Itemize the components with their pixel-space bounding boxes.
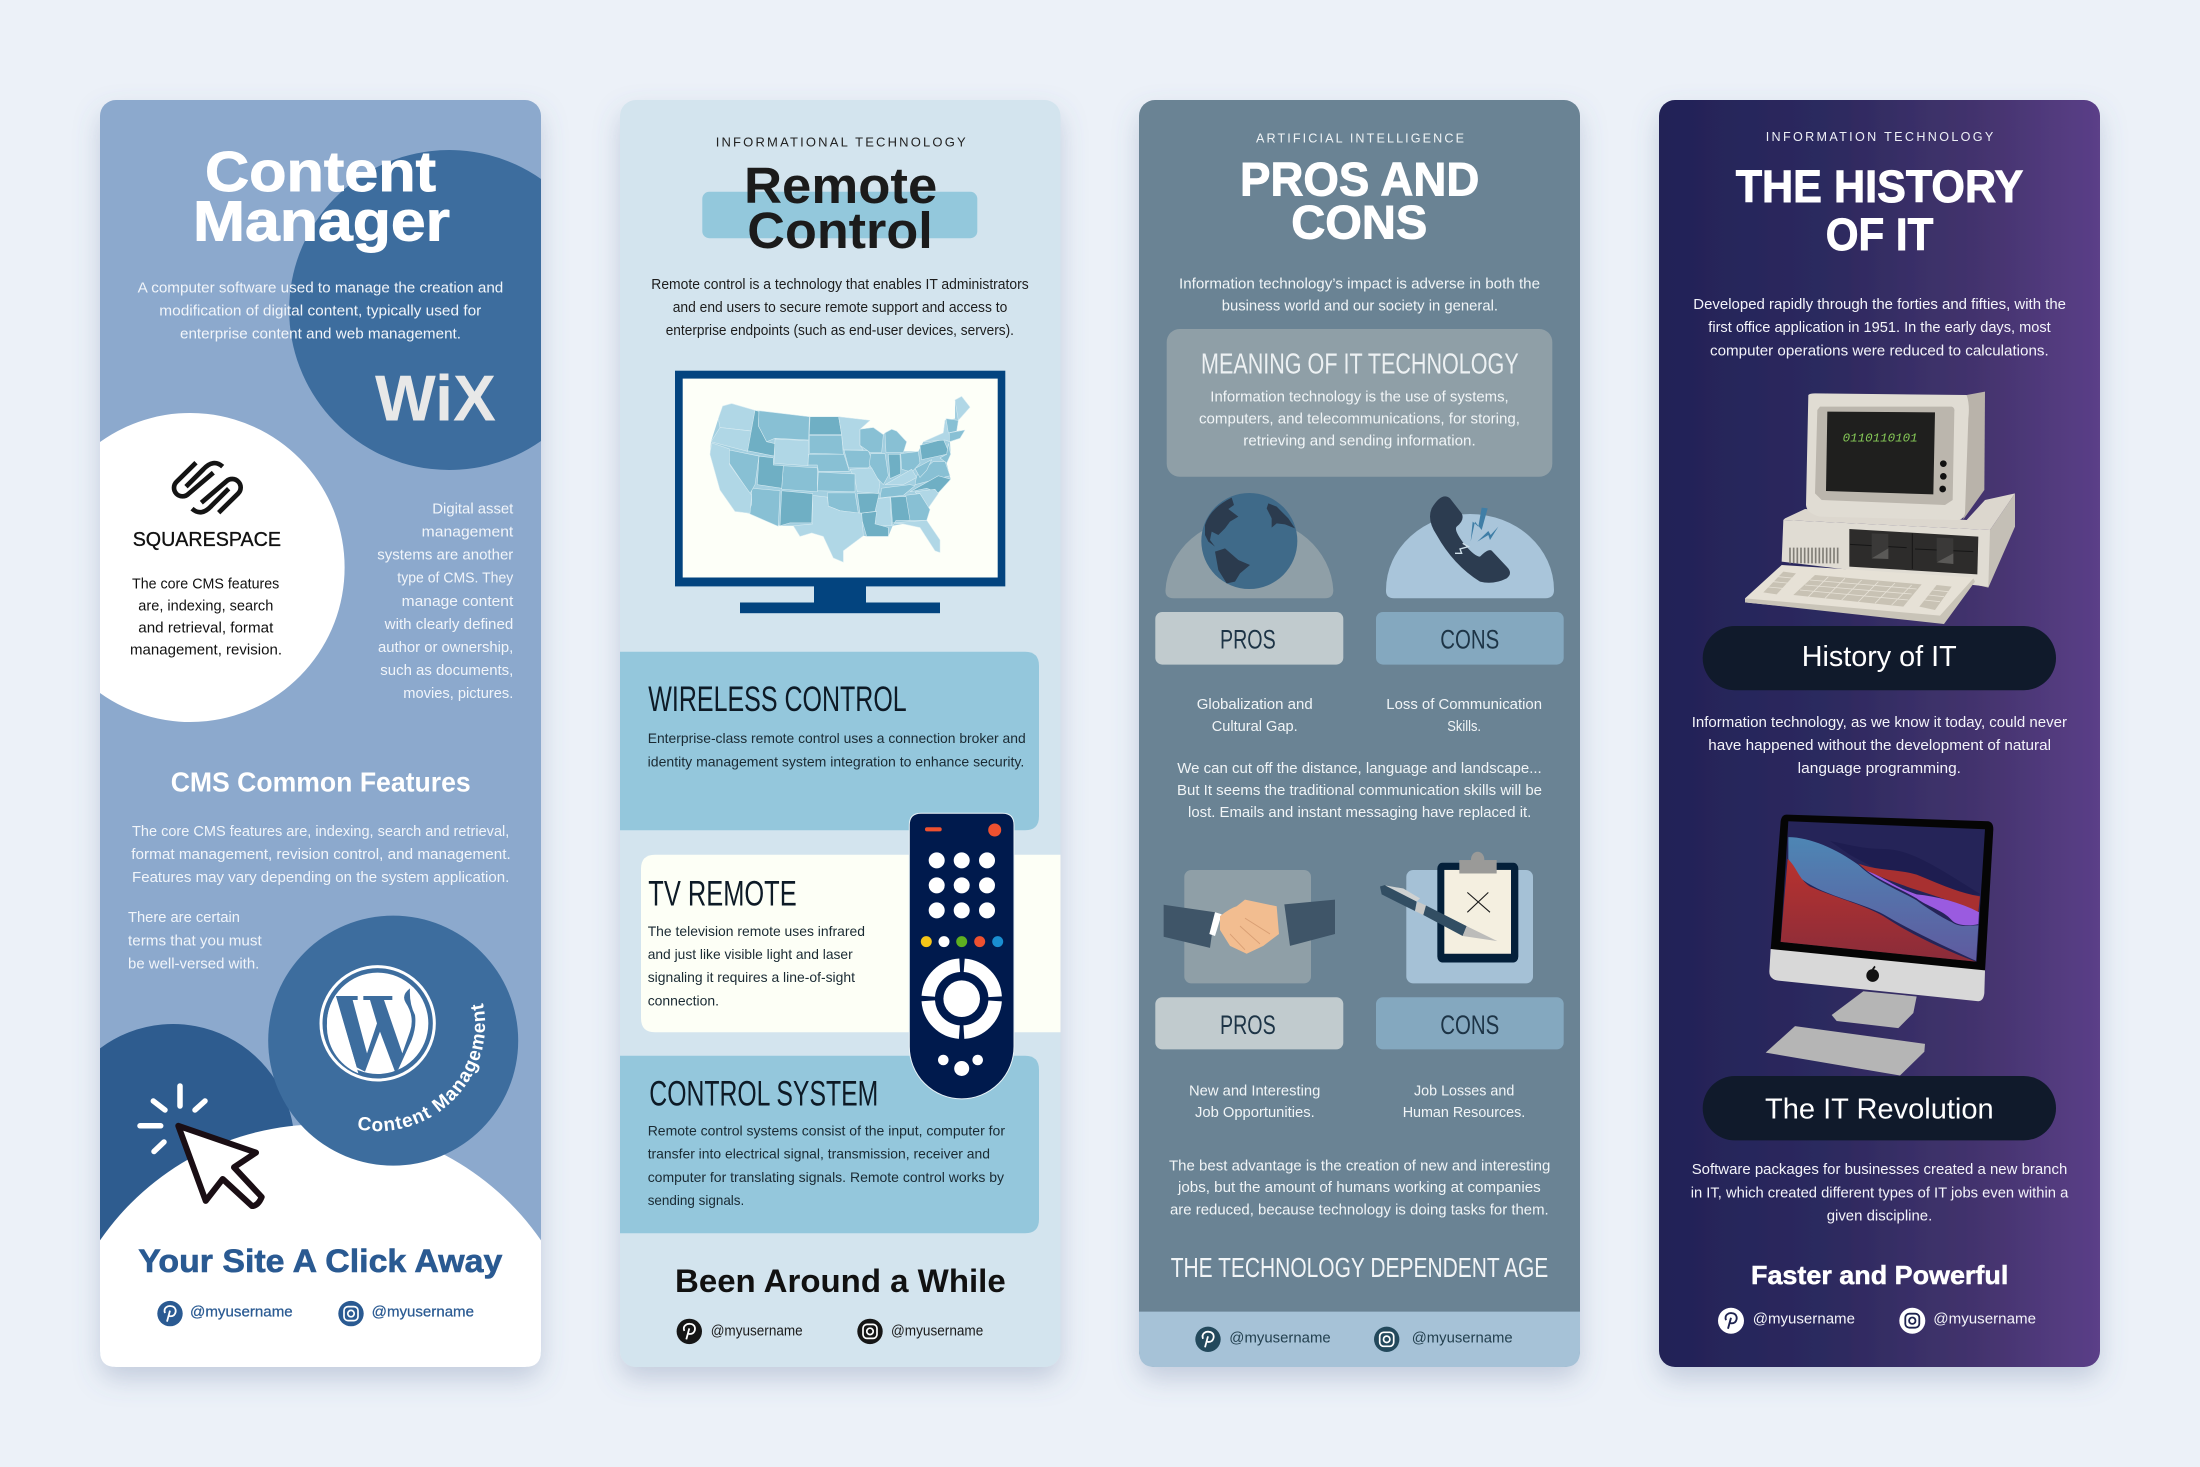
heading: CMS Common Features: CMS Common Features — [171, 767, 471, 798]
text: best advantage: jobs, but the amount of humans working at companies — [1177, 1179, 1541, 1196]
icon: broken phone on dome — [1386, 496, 1554, 598]
text: digital asset management: systems are another — [377, 547, 513, 564]
pill: The IT Revolution — [1703, 1076, 2056, 1140]
social: pinterest — [1195, 1327, 1331, 1352]
badge: cons — [1376, 997, 1564, 1049]
badge: pros: PROS — [1220, 1010, 1276, 1040]
icon: click sparks — [140, 1086, 205, 1152]
social: instagram — [1374, 1327, 1513, 1352]
card: TV Remote — [641, 855, 1060, 1032]
text: natural language: Information technology, as we know it today, could never — [1692, 714, 2067, 731]
icon: handshake — [1164, 870, 1335, 983]
box: meaning of IT technology — [1167, 329, 1552, 477]
card: TV Remote: signaling it requires a line-of-sight — [648, 969, 855, 985]
social: instagram: @myusername — [372, 1304, 474, 1321]
text: communication: But It seems the traditional communication skills will be — [1177, 782, 1542, 799]
intro text: Information technology’s impact is adverse in both the — [1179, 276, 1540, 293]
social: instagram — [857, 1319, 983, 1344]
intro text: Developed rapidly through the forties and fifties, with the — [1693, 296, 2066, 313]
badge: cons — [1376, 612, 1564, 665]
intro text: Remote control is a technology that enables IT administrators — [651, 277, 1029, 293]
text: communication — [1177, 760, 1542, 821]
text: digital asset management: with clearly defined — [384, 616, 513, 633]
text: digital asset management: type of CMS. They — [397, 570, 514, 587]
intro text: computer operations were reduced to calculations. — [1710, 342, 2049, 359]
text: features description: The core CMS features are, indexing, search and retrieval, — [132, 823, 509, 840]
text: digital asset management: management — [422, 524, 514, 541]
card: Control System: sending signals. — [648, 1192, 744, 1208]
eyebrow: ARTIFICIAL INTELLIGENCE — [1256, 132, 1464, 146]
title highlight bar — [702, 192, 977, 238]
social: instagram — [1899, 1308, 2036, 1334]
text: natural language: language programming. — [1798, 760, 1961, 777]
panel: The History of IT — [1659, 100, 2100, 1367]
text: pros two — [1189, 1082, 1320, 1121]
logo: Squarespace wordmark: SQUARESPACE — [133, 528, 281, 551]
badge: pros: PROS — [1220, 624, 1276, 654]
social: instagram: @myusername — [891, 1324, 983, 1340]
icon: retro computer: 0110110101 — [1843, 431, 1918, 445]
heading: Been Around a While: Been Around a While — [675, 1263, 1006, 1299]
card: Control System: transfer into electrical signal, transmission, receiver and — [648, 1146, 990, 1162]
title: Content — [205, 140, 436, 204]
card: Wireless Control: Enterprise-class remote control uses a connection broker and — [648, 730, 1026, 746]
text: digital asset management: movies, pictures. — [403, 685, 513, 702]
pill: History of IT — [1703, 626, 2056, 690]
text: features description: Features may vary depending on the system application. — [132, 869, 509, 886]
logo: Wix: WiX — [375, 361, 496, 434]
badge: cons: CONS — [1440, 624, 1499, 654]
box: meaning of IT technology: retrieving and sending information. — [1243, 433, 1476, 450]
intro text: enterprise content and web management. — [180, 326, 461, 342]
text: digital asset management — [377, 501, 514, 702]
text: software packages: in IT, which created different types of IT jobs even within a — [1691, 1184, 2069, 1201]
card: TV Remote: and just like visible light and laser — [648, 946, 853, 962]
title: Control — [747, 202, 933, 259]
text: core features: The core CMS features — [132, 576, 279, 593]
card: Control System: CONTROL SYSTEM — [649, 1074, 878, 1113]
social: pinterest — [157, 1301, 293, 1326]
badge: pros — [1155, 612, 1343, 665]
text: cons one — [1386, 696, 1542, 735]
text: digital asset management: manage content — [402, 593, 514, 610]
heading: Faster and Powerful: Faster and Powerful — [1751, 1260, 2008, 1290]
social: instagram: @myusername — [1933, 1310, 2036, 1328]
title — [1240, 152, 1479, 248]
icon: modern desktop computer — [1766, 815, 1993, 1076]
card: TV Remote: The television remote uses infrared — [648, 923, 865, 939]
map: United States — [710, 396, 970, 562]
text: natural language — [1692, 714, 2067, 777]
icon: TV remote — [909, 813, 1014, 1099]
text: terms: be well-versed with. — [128, 955, 259, 972]
card: Wireless Control: identity management system integration to enhance security. — [648, 754, 1024, 770]
icon: WordPress logo — [321, 967, 434, 1080]
text: core features: and retrieval, format — [138, 620, 274, 636]
text: features description: format management, revision control, and management. — [131, 846, 511, 863]
text: best advantage: The best advantage is the creation of new and interesting — [1169, 1157, 1550, 1174]
text: pros one: Cultural Gap. — [1212, 718, 1298, 735]
eyebrow: INFORMATION TECHNOLOGY — [1766, 130, 1994, 144]
intro text: first office application in 1951. In the early days, most — [1708, 319, 2051, 336]
intro text: enterprise endpoints (such as end-user devices, servers). — [666, 323, 1014, 339]
text: best advantage: are reduced, because technology is doing tasks for them. — [1170, 1201, 1549, 1218]
box: meaning of IT technology: MEANING OF IT TECHNOLOGY — [1201, 349, 1519, 381]
text: best advantage — [1169, 1157, 1550, 1218]
text: pros two: Job Opportunities. — [1195, 1104, 1315, 1121]
eyebrow: INFORMATIONAL TECHNOLOGY — [716, 134, 966, 149]
title: THE HISTORY — [1736, 161, 2023, 212]
intro text: and end users to secure remote support and access to — [673, 300, 1007, 316]
title: Remote — [744, 157, 937, 214]
text: pros two: New and Interesting — [1189, 1082, 1320, 1099]
text: digital asset management: author or ownership, — [378, 639, 513, 656]
text: software packages: given discipline. — [1827, 1208, 1932, 1225]
social: pinterest: @myusername — [190, 1304, 293, 1321]
card: Control System: Remote control systems consist of the input, computer for — [648, 1122, 1005, 1138]
icon: cursor arrow — [178, 1126, 262, 1206]
social: pinterest — [677, 1319, 803, 1344]
text: terms — [128, 909, 263, 972]
title — [1736, 161, 2023, 260]
title: Manager — [193, 190, 450, 254]
title: OF IT — [1826, 209, 1933, 260]
text: natural language: have happened without the development of natural — [1708, 737, 2051, 754]
text: software packages — [1691, 1161, 2069, 1225]
intro text — [138, 280, 503, 342]
title — [193, 140, 450, 254]
text: communication: We can cut off the distance, language and landscape... — [1177, 760, 1542, 777]
icon: clipboard and pen — [1380, 852, 1533, 983]
logo: Squarespace mark — [174, 463, 241, 513]
text: cons two: Human Resources. — [1403, 1104, 1525, 1121]
intro text — [651, 277, 1029, 339]
social: pinterest: @myusername — [1229, 1330, 1331, 1346]
intro text: business world and our society in general. — [1222, 298, 1498, 315]
text: core features — [130, 576, 282, 659]
text: core features: are, indexing, search — [138, 597, 273, 614]
panel: Pros and Cons — [1139, 100, 1580, 1367]
text: software packages: Software packages for businesses created a new branch — [1692, 1161, 2067, 1178]
social: pinterest: @myusername — [711, 1324, 803, 1340]
text: cons two: Job Losses and — [1414, 1082, 1514, 1099]
badge: pros — [1155, 997, 1343, 1049]
curved label: Content Management: Content Management — [358, 1003, 486, 1132]
social: instagram: @myusername — [1412, 1330, 1513, 1346]
text: communication: lost. Emails and instant messaging have replaced it. — [1188, 804, 1531, 821]
text: features description — [131, 823, 511, 886]
box: meaning of IT technology: computers, and telecommunications, for storing, — [1199, 410, 1520, 428]
title — [744, 157, 937, 259]
pill: The IT Revolution: The IT Revolution — [1765, 1094, 1994, 1126]
icon: monitor — [675, 371, 1005, 613]
panel: Remote Control — [620, 100, 1060, 1367]
panel: Content Manager — [89, 100, 552, 1390]
card: TV Remote: TV REMOTE — [648, 875, 797, 914]
intro text — [1693, 296, 2066, 359]
intro text: A computer software used to manage the creation and — [138, 280, 503, 296]
icon: retro computer — [1745, 392, 2015, 624]
text: core features: management, revision. — [130, 642, 282, 659]
social: pinterest: @myusername — [1753, 1310, 1855, 1328]
text: terms: terms that you must — [128, 932, 263, 949]
card: Wireless Control: WIRELESS CONTROL — [648, 680, 907, 719]
heading: Your Site A Click Away: Your Site A Click Away — [138, 1243, 503, 1279]
social: instagram — [338, 1301, 474, 1326]
box: meaning of IT technology: Information technology is the use of systems, — [1210, 388, 1509, 405]
title: PROS AND — [1240, 152, 1479, 205]
badge: cons: CONS — [1440, 1010, 1499, 1040]
heading: The Technology Dependent Age: THE TECHNOLOGY DEPENDENT AGE — [1171, 1252, 1548, 1283]
card: TV Remote: connection. — [648, 992, 719, 1008]
title: CONS — [1291, 195, 1427, 248]
text: pros one: Globalization and — [1197, 696, 1313, 713]
intro text — [1179, 276, 1540, 315]
text: cons two — [1403, 1082, 1525, 1121]
text: digital asset management: Digital asset — [432, 501, 514, 518]
card: Control System — [620, 1056, 1039, 1233]
icon: globe on dome — [1165, 493, 1333, 598]
text: digital asset management: such as documents, — [380, 662, 513, 679]
social: pinterest — [1718, 1308, 1855, 1334]
card: Wireless Control — [620, 652, 1039, 830]
text: cons one: Skills. — [1447, 718, 1481, 735]
text: terms: There are certain — [128, 909, 240, 926]
text: pros one — [1197, 696, 1313, 735]
card: Control System: computer for translating signals. Remote control works by — [648, 1169, 1004, 1185]
pill: History of IT: History of IT — [1802, 641, 1957, 673]
intro text: modification of digital content, typically used for — [159, 302, 481, 320]
footer strip — [1139, 1312, 1580, 1367]
text: cons one: Loss of Communication — [1386, 696, 1542, 713]
